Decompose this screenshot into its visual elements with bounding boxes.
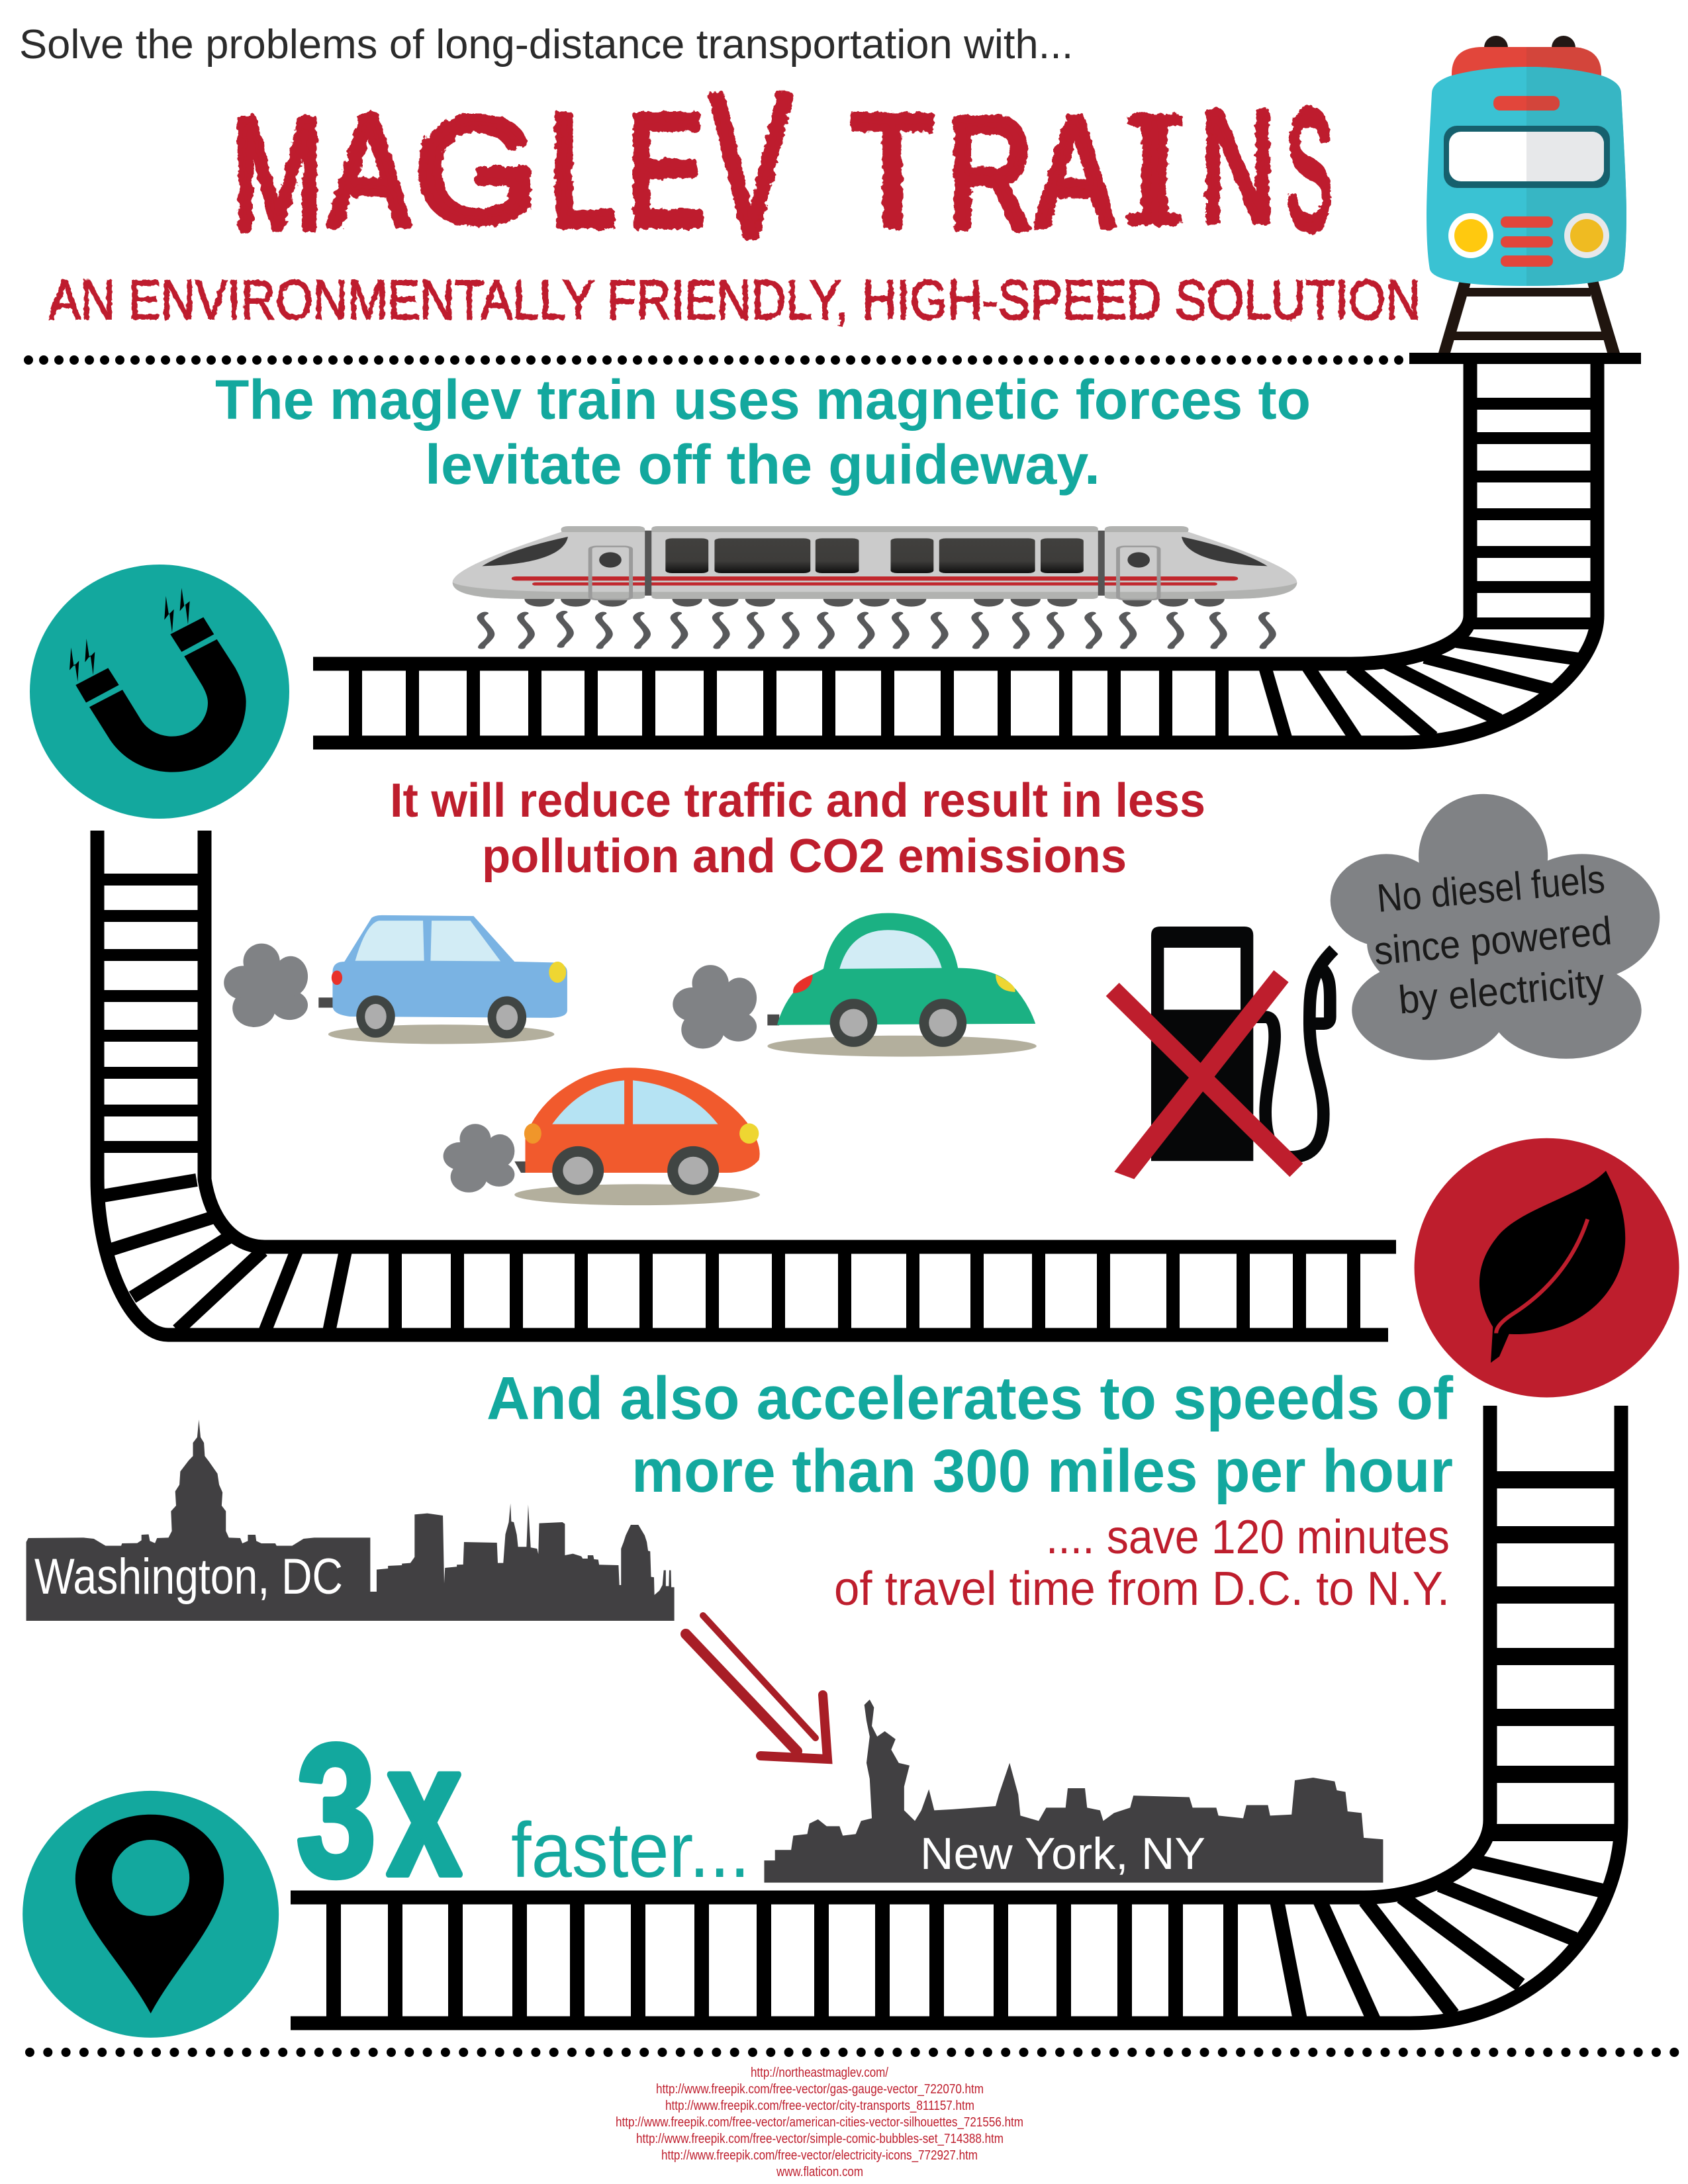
icon: location pin in teal circle [23, 1791, 279, 2038]
title: N [1200, 78, 1276, 255]
magnet [70, 588, 246, 772]
heading: traffic: pollution and CO2 emissions [482, 830, 1127, 883]
text: time saved: .... save 120 minutes [1046, 1511, 1450, 1564]
track: middle [97, 831, 1396, 1335]
maglev train side view [453, 526, 1297, 647]
icon: front of train on track [1427, 36, 1626, 353]
sources: http://www.freepik.com/free-vector/american-cities-vector-silhouettes_721556.htm [616, 2115, 1023, 2130]
headlights [1448, 213, 1609, 258]
heading: levitate: The maglev train uses magnetic forces to [215, 369, 1311, 431]
3x faster: 3 [296, 1706, 377, 1916]
red stripes [512, 576, 1238, 586]
cloud text: No diesel fuels [1375, 856, 1607, 921]
label: New York: New York, NY [920, 1829, 1205, 1879]
sources: www.flaticon.com [776, 2165, 863, 2179]
title: R [947, 85, 1033, 262]
pump body [1151, 927, 1253, 1161]
speech cloud [1331, 794, 1660, 1060]
roof [1452, 47, 1601, 83]
icon: leaf in red circle [1415, 1138, 1679, 1397]
label: Washington: Washington, DC [34, 1549, 343, 1605]
subtitle: AN ENVIRONMENTALLY FRIENDLY, HIGH-SPEED SOLUTION [48, 269, 1421, 331]
New York skyline [764, 1700, 1383, 1883]
sources: http://www.freepik.com/free-vector/simple-comic-bubbles-set_714388.htm [636, 2132, 1004, 2146]
3x faster: x [387, 1704, 462, 1915]
icon: crossed-out fuel pump [1106, 927, 1334, 1179]
icon: magnet in teal circle [30, 565, 289, 819]
grille [1501, 216, 1553, 267]
title: G [414, 87, 538, 253]
text: time saved: of travel time from D.C. to N.Y. [834, 1563, 1450, 1615]
sources: http://www.freepik.com/free-vector/gas-gauge-vector_722070.htm [656, 2082, 984, 2097]
cloud text: since powered [1372, 909, 1613, 974]
hose and nozzle [1253, 950, 1334, 1157]
heading: traffic: It will reduce traffic and result in less [390, 774, 1205, 827]
3x faster [296, 1704, 750, 1916]
cloud text: by electricity [1397, 960, 1607, 1023]
title: V [710, 52, 792, 278]
icon: red car [444, 1068, 760, 1205]
title: T [851, 81, 934, 259]
track: bottom [291, 1406, 1621, 2023]
top lamp [1493, 96, 1560, 111]
doors and couplers [590, 531, 1158, 600]
heading: speed: And also accelerates to speeds of [487, 1365, 1453, 1432]
title [232, 52, 1333, 278]
3x faster: faster... [511, 1807, 750, 1894]
icon: blue car [224, 915, 567, 1044]
sources: http://www.freepik.com/free-vector/city-transports_811157.htm [665, 2099, 974, 2113]
sources: http://northeastmaglev.com/ [751, 2066, 888, 2080]
windscreen [1444, 126, 1610, 188]
wheels [524, 591, 1225, 607]
train legs / rails [1438, 278, 1620, 353]
track: top [313, 353, 1641, 743]
train body [1427, 67, 1626, 286]
text: S [1286, 76, 1333, 265]
title: A [1035, 83, 1114, 260]
title: M [232, 85, 323, 262]
heading: speed: more than 300 miles per hour [632, 1437, 1453, 1505]
sources [616, 2066, 1023, 2179]
text: time saved [834, 1511, 1450, 1615]
sources: http://www.freepik.com/free-vector/electricity-icons_772927.htm [661, 2148, 978, 2163]
levitation waves [481, 612, 1272, 647]
heading: speed [487, 1365, 1453, 1505]
train carriages [453, 526, 645, 599]
heading: levitate [215, 369, 1311, 496]
red cross [1106, 970, 1303, 1179]
title: I [1125, 80, 1184, 256]
cloud text [1372, 856, 1613, 1023]
intro line: Solve the problems of long-distance transportation with... [19, 21, 1073, 68]
title: A [328, 81, 409, 259]
pantographs [1484, 36, 1575, 60]
heading: levitate: levitate off the guideway. [425, 433, 1100, 496]
icon: green car [673, 913, 1037, 1057]
arrow [686, 1615, 827, 1759]
sparks [70, 588, 190, 682]
title: L [549, 81, 616, 259]
title: E [626, 81, 705, 259]
train windows [665, 538, 1084, 573]
Washington DC skyline [26, 1420, 675, 1621]
heading: traffic [390, 774, 1205, 883]
